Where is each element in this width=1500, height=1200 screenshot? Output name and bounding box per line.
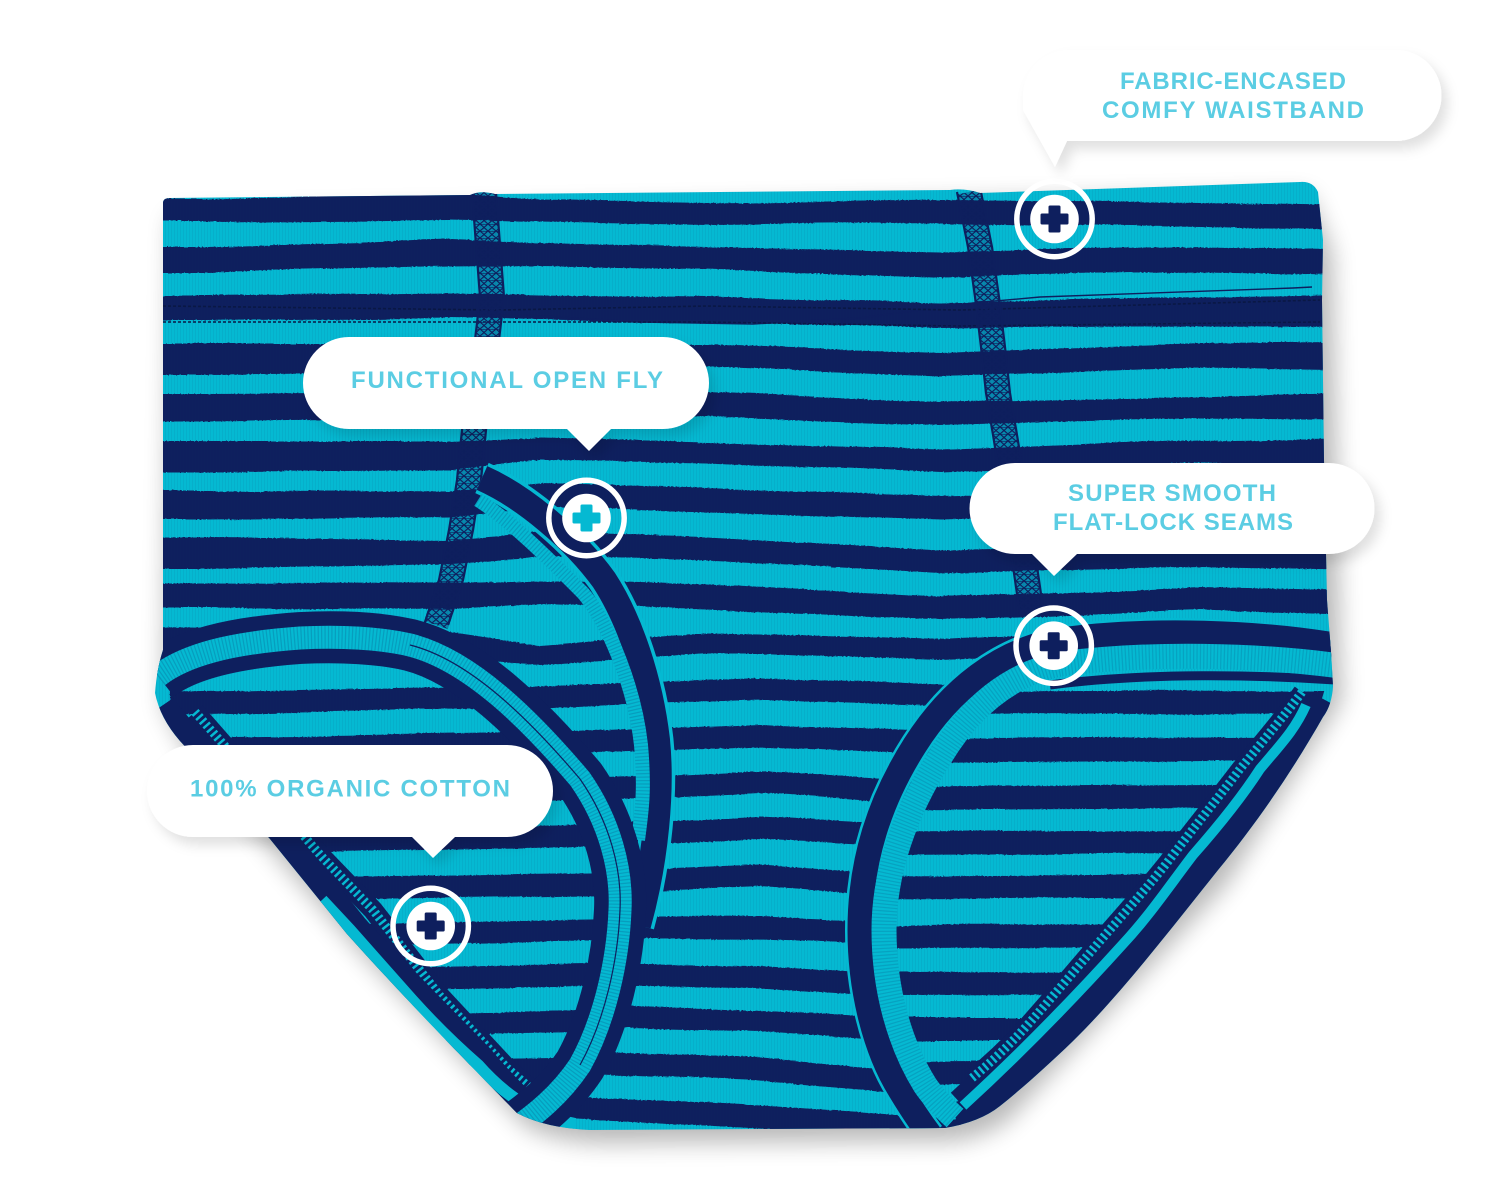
navy body stripes bbox=[150, 193, 1340, 1130]
callout: functional open fly: FUNCTIONAL OPEN FLY bbox=[351, 367, 663, 394]
marker: organic cotton bbox=[393, 888, 468, 964]
callout: 100% organic cotton bbox=[147, 745, 553, 858]
callout: functional open fly bbox=[303, 337, 709, 451]
garment fabric clipped to silhouette bbox=[140, 170, 1350, 1150]
right leg edge binding bbox=[955, 692, 1325, 1116]
callout: super smooth flat-lock seams: SUPER SMOOTH bbox=[1068, 480, 1276, 507]
callout: 100% organic cotton: 100% ORGANIC COTTON bbox=[190, 776, 510, 802]
right leg inner panel bbox=[896, 689, 1324, 1096]
callout: fabric-encased comfy waistband: FABRIC-ENCASED bbox=[1120, 68, 1346, 95]
callout: fabric-encased comfy waistband: COMFY WAISTBAND bbox=[1102, 97, 1364, 124]
left leg edge binding bbox=[163, 705, 575, 1124]
marker: open fly bbox=[549, 480, 624, 556]
callout: super smooth flat-lock seams bbox=[970, 463, 1374, 576]
right leg opening binding bbox=[860, 633, 1340, 1135]
fine knit texture bbox=[140, 170, 1350, 1150]
teal base fabric bbox=[140, 170, 1350, 1150]
left leg opening binding bbox=[158, 637, 620, 1132]
striped briefs garment bbox=[140, 170, 1350, 1150]
right flat-lock seam bbox=[957, 192, 1044, 615]
callout: super smooth flat-lock seams: FLAT-LOCK SEAMS bbox=[1053, 509, 1293, 536]
left leg inner panel bbox=[169, 686, 594, 1079]
fly opening trim bbox=[478, 478, 659, 925]
callout: fabric-encased comfy waistband bbox=[1023, 50, 1442, 167]
left flat-lock seam bbox=[424, 192, 504, 625]
garment drop shadow bbox=[164, 195, 1342, 1143]
marker: flat-lock seams bbox=[1016, 608, 1091, 683]
waistband stitching bbox=[163, 287, 1320, 326]
marker: waistband bbox=[1017, 181, 1092, 257]
